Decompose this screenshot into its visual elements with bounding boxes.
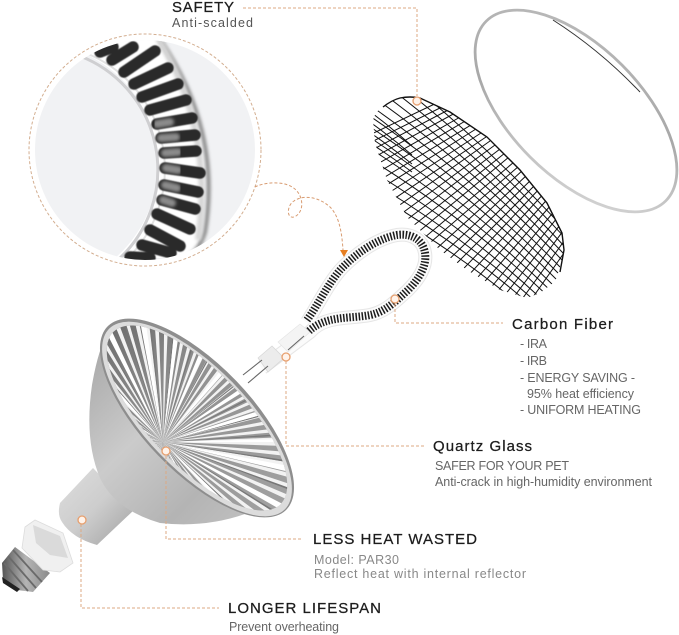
curly arrow <box>255 183 348 257</box>
coil teeth <box>100 47 200 258</box>
carbon fiber filament in quartz tube <box>243 235 425 383</box>
zoom circle: coil detail <box>29 34 261 266</box>
dome <box>89 332 280 524</box>
callout: quartz glass: Anti-crack in high-humidity environment <box>435 475 653 489</box>
callout: carbon fiber: - IRB <box>520 354 547 368</box>
quartz glass envelope <box>262 235 425 368</box>
callout: carbon fiber: 95% heat efficiency <box>527 387 635 401</box>
neck <box>59 468 134 545</box>
E27 screw base <box>2 520 73 592</box>
callout: less heat wasted: Reflect heat with internal reflector <box>314 567 526 581</box>
callout: longer lifespan: Prevent overheating <box>229 620 339 634</box>
callout: carbon fiber: Carbon Fiber <box>512 316 613 333</box>
callout: less heat wasted: LESS HEAT WASTED <box>313 531 477 548</box>
reflector bulb body <box>58 318 294 545</box>
callout: less heat wasted: Model: PAR30 <box>314 553 399 567</box>
callout: carbon fiber: - ENERGY SAVING - <box>520 371 635 385</box>
coil <box>307 235 425 332</box>
callout: carbon fiber: - UNIFORM HEATING <box>520 403 641 417</box>
rim <box>69 288 325 548</box>
callout: quartz glass: SAFER FOR YOUR PET <box>435 459 569 473</box>
callout: longer lifespan: LONGER LIFESPAN <box>228 600 381 617</box>
callout: less heat wasted <box>162 447 526 581</box>
callout: carbon fiber: - IRA <box>520 337 548 351</box>
reflector interior <box>106 326 288 510</box>
glass ring <box>440 0 679 247</box>
callout: carbon fiber <box>391 295 641 417</box>
callout: safety <box>172 0 421 105</box>
callout: quartz glass <box>282 353 653 489</box>
callout: longer lifespan <box>78 516 381 634</box>
callout: safety: Anti-scalded <box>172 16 253 30</box>
wire mesh guard <box>373 96 565 298</box>
callout: quartz glass: Quartz Glass <box>433 438 532 455</box>
lead wires <box>243 336 304 383</box>
